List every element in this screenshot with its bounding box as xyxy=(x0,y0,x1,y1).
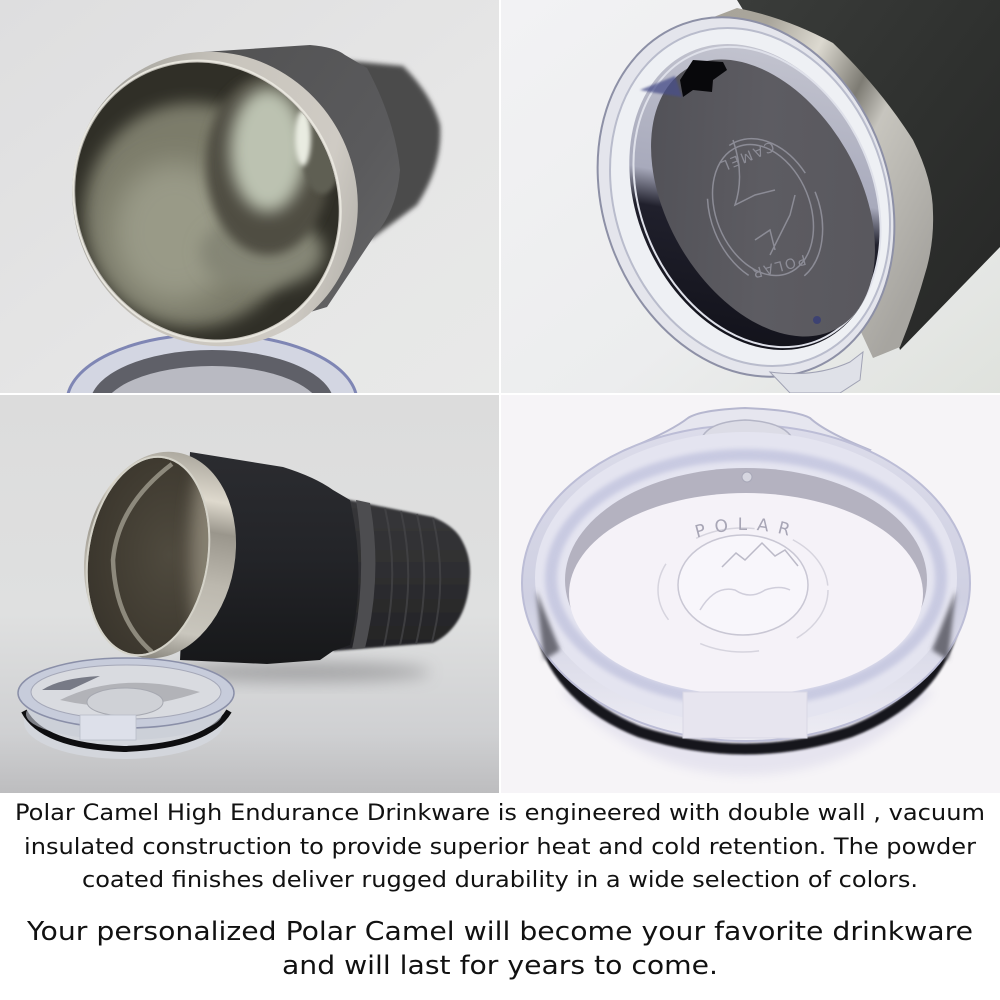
ribs xyxy=(384,508,440,646)
rim lip highlight xyxy=(72,60,342,342)
small clear lid xyxy=(18,658,234,759)
lid floor xyxy=(569,493,923,695)
text block: product description xyxy=(15,801,985,893)
lid outer shell xyxy=(522,425,970,741)
lid grip tab xyxy=(624,407,872,450)
black gasket xyxy=(541,632,952,749)
grip tab inner recess xyxy=(702,419,792,436)
front tab xyxy=(683,692,807,738)
dark lid centre xyxy=(651,60,875,336)
text block: closing statement: Your personalized Polar Camel will become your favorite drinkware xyxy=(26,917,973,947)
embossed logo: CAMEL xyxy=(717,137,776,174)
steel band xyxy=(715,8,934,358)
vent hole xyxy=(813,316,821,324)
grey arc above floor xyxy=(565,468,927,608)
bright inner edge xyxy=(632,46,882,348)
tumbler base, out of focus xyxy=(340,60,440,240)
embossed logo xyxy=(657,518,829,653)
text block: closing statement: and will last for years to come. xyxy=(282,951,718,981)
ribbed lower body xyxy=(333,498,470,651)
tumbler body xyxy=(203,45,400,330)
text block: product description: insulated construction to provide superior heat and cold retention. The powder xyxy=(24,835,977,860)
clear lid rim xyxy=(596,16,896,378)
upper body xyxy=(180,452,358,664)
lid spout xyxy=(770,352,863,393)
lid skirt below gasket xyxy=(560,690,935,775)
dark reflection at lid sides xyxy=(536,590,956,660)
steel rim xyxy=(72,52,358,346)
text block: product description: coated finishes deliver rugged durability in a wide selection of colors. xyxy=(82,868,918,893)
panel: large clear lid photo xyxy=(501,395,1000,793)
text block: closing statement xyxy=(26,917,973,981)
embossed logo: POLAR xyxy=(695,518,789,538)
sip opening xyxy=(680,60,727,97)
embossed logo: POLAR xyxy=(748,251,808,281)
black tumbler body xyxy=(737,0,1000,350)
blue refraction at sip opening xyxy=(640,76,682,97)
panel: full tumbler and lid photo xyxy=(0,395,499,793)
lid inner wall xyxy=(629,44,880,350)
tumbler interior xyxy=(75,62,339,340)
vent hole xyxy=(742,472,752,482)
shadow xyxy=(170,662,430,682)
grey neck band xyxy=(352,500,375,649)
lid behind tumbler xyxy=(66,336,358,393)
panel: tumbler interior photo xyxy=(0,0,499,393)
tumbler opening xyxy=(88,458,208,654)
embossed logo xyxy=(706,138,824,278)
text block: product description: Polar Camel High Endurance Drinkware is engineered with double wall , vacuum xyxy=(15,801,985,826)
panel: lid underside on tumbler photo xyxy=(501,0,1000,419)
opening lip xyxy=(86,456,210,656)
steel rim xyxy=(84,452,236,658)
inner wall blue reflections xyxy=(551,455,941,701)
